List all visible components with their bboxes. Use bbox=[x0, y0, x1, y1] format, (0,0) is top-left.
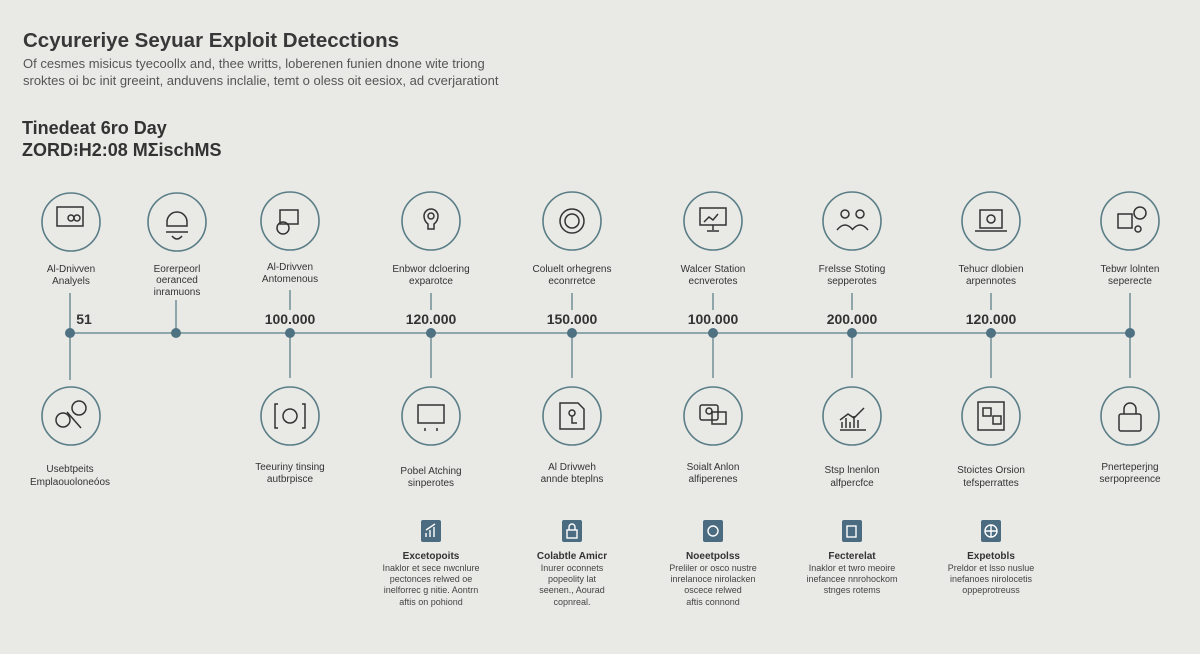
subtitle bbox=[23, 56, 498, 88]
top labels: Coluelt orhegrens bbox=[533, 264, 611, 275]
timeline heading bbox=[22, 118, 222, 160]
timeline heading: Tinedeat 6ro Day bbox=[22, 118, 167, 138]
bottom labels: sinperotes bbox=[408, 478, 454, 489]
bottom cards text: inefanoes nirolocetis bbox=[950, 574, 1033, 584]
bottom cards text: Inaklor et sece nwcnlure bbox=[382, 563, 480, 573]
dots bbox=[65, 328, 1135, 338]
bottom cards text: aftis connond bbox=[686, 597, 740, 607]
top labels: Tehucr dlobien bbox=[958, 264, 1024, 275]
bottom cards text: copnreal. bbox=[553, 597, 591, 607]
bottom cards text: Inaklor et twro meoire bbox=[809, 563, 895, 573]
top labels: Enbwor dcloering bbox=[392, 264, 470, 275]
bottom cards text bbox=[382, 551, 1034, 607]
top labels: Analyels bbox=[52, 276, 90, 287]
bottom cards text: Colabtle Amicr bbox=[537, 551, 607, 562]
top icons bbox=[57, 207, 1146, 239]
top labels: Al-Dnivven bbox=[47, 264, 95, 275]
bottom cards text: popeolity lat bbox=[548, 574, 597, 584]
numbers: 120.000 bbox=[966, 311, 1017, 327]
top labels bbox=[47, 262, 1159, 298]
bottom cards text: inefancee nnrohockom bbox=[806, 574, 898, 584]
bottom labels: Emplaouoloneóos bbox=[30, 477, 110, 488]
top labels: Frelsse Stoting bbox=[819, 264, 885, 275]
bottom cards text: Preliler or osco nustre bbox=[669, 563, 757, 573]
subtitle: Of cesmes misicus tyecoollx and, thee writts, loberenen funien dnone wite triong bbox=[23, 56, 485, 71]
bottom icons bbox=[56, 401, 1141, 431]
bottom cards text: oppeprotreuss bbox=[962, 585, 1020, 595]
top labels: Tebwr lolnten bbox=[1101, 264, 1159, 275]
bottom cards text: Excetopoits bbox=[403, 551, 460, 562]
bottom labels: autbrpisce bbox=[267, 474, 314, 485]
numbers: 120.000 bbox=[406, 311, 457, 327]
top labels: oeranced bbox=[156, 275, 198, 286]
numbers: 150.000 bbox=[547, 311, 598, 327]
bottom labels: Pnerteperjng bbox=[1101, 462, 1159, 473]
top labels: seperecte bbox=[1108, 276, 1152, 287]
bottom labels: alfpercfce bbox=[830, 478, 874, 489]
top labels: Eorerpeorl bbox=[154, 264, 200, 275]
top icon circles bbox=[42, 192, 1159, 251]
bottom labels: serpopreence bbox=[1099, 474, 1161, 485]
bottom cards text: inelforrec g nitie. Aontrn bbox=[384, 585, 478, 595]
bottom labels: Stsp lnenlon bbox=[824, 465, 880, 476]
bottom cards text: Inurer oconnets bbox=[541, 563, 604, 573]
bottom icon circles bbox=[42, 387, 1159, 445]
top labels: ecnverotes bbox=[689, 276, 737, 287]
numbers: 51 bbox=[76, 311, 92, 327]
top labels: Walcer Station bbox=[681, 264, 745, 275]
bottom labels: Stoictes Orsion bbox=[957, 465, 1025, 476]
top labels: Al-Drivven bbox=[267, 262, 313, 273]
bottom labels: Soialt Anlon bbox=[687, 462, 739, 473]
bottom cards text: Expetobls bbox=[967, 551, 1015, 562]
top labels: econrretce bbox=[548, 276, 596, 287]
bottom labels: tefsperrattes bbox=[963, 478, 1019, 489]
bottom labels: alfiperenes bbox=[689, 474, 737, 485]
bottom labels: Pobel Atching bbox=[400, 466, 462, 477]
bottom cards text: oscece relwed bbox=[684, 585, 742, 595]
top labels: sepperotes bbox=[827, 276, 877, 287]
bottom cards text: Fecterelat bbox=[828, 551, 876, 562]
bottom cards text: seenen., Aourad bbox=[539, 585, 605, 595]
bottom cards text: aftis on pohiond bbox=[399, 597, 463, 607]
top labels: arpennotes bbox=[966, 276, 1016, 287]
numbers: 100.000 bbox=[265, 311, 316, 327]
top labels: exparotce bbox=[409, 276, 453, 287]
numbers: 100.000 bbox=[688, 311, 739, 327]
bottom cards text: inrelanoce nirolacken bbox=[670, 574, 756, 584]
top labels: Antomenous bbox=[262, 274, 318, 285]
bottom labels: Usebtpeits bbox=[46, 464, 94, 475]
small square icons bbox=[421, 520, 1001, 542]
bottom cards text: Noeetpolss bbox=[686, 551, 740, 562]
bottom labels: Teeuriny tinsing bbox=[255, 462, 325, 473]
top labels: inramuons bbox=[154, 287, 200, 298]
bottom labels: annde bteplns bbox=[541, 474, 603, 485]
subtitle: sroktes oi bc init greeint, anduvens inclalie, temt o oless oit eesiox, ad cverjarationt bbox=[23, 73, 498, 88]
numbers bbox=[76, 311, 1017, 327]
bottom cards text: stnges rotems bbox=[824, 585, 881, 595]
timeline heading: ZORD⁝H2:08 MΣischMS bbox=[22, 140, 222, 160]
title: Ccyureriye Seyuar Exploit Detecctions bbox=[23, 29, 399, 52]
numbers: 200.000 bbox=[827, 311, 878, 327]
bottom labels bbox=[30, 462, 1161, 489]
bottom labels: Al Drivweh bbox=[548, 462, 596, 473]
bottom cards text: Preldor et lsso nuslue bbox=[948, 563, 1034, 573]
bottom cards text: pectonces relwed oe bbox=[390, 574, 472, 584]
